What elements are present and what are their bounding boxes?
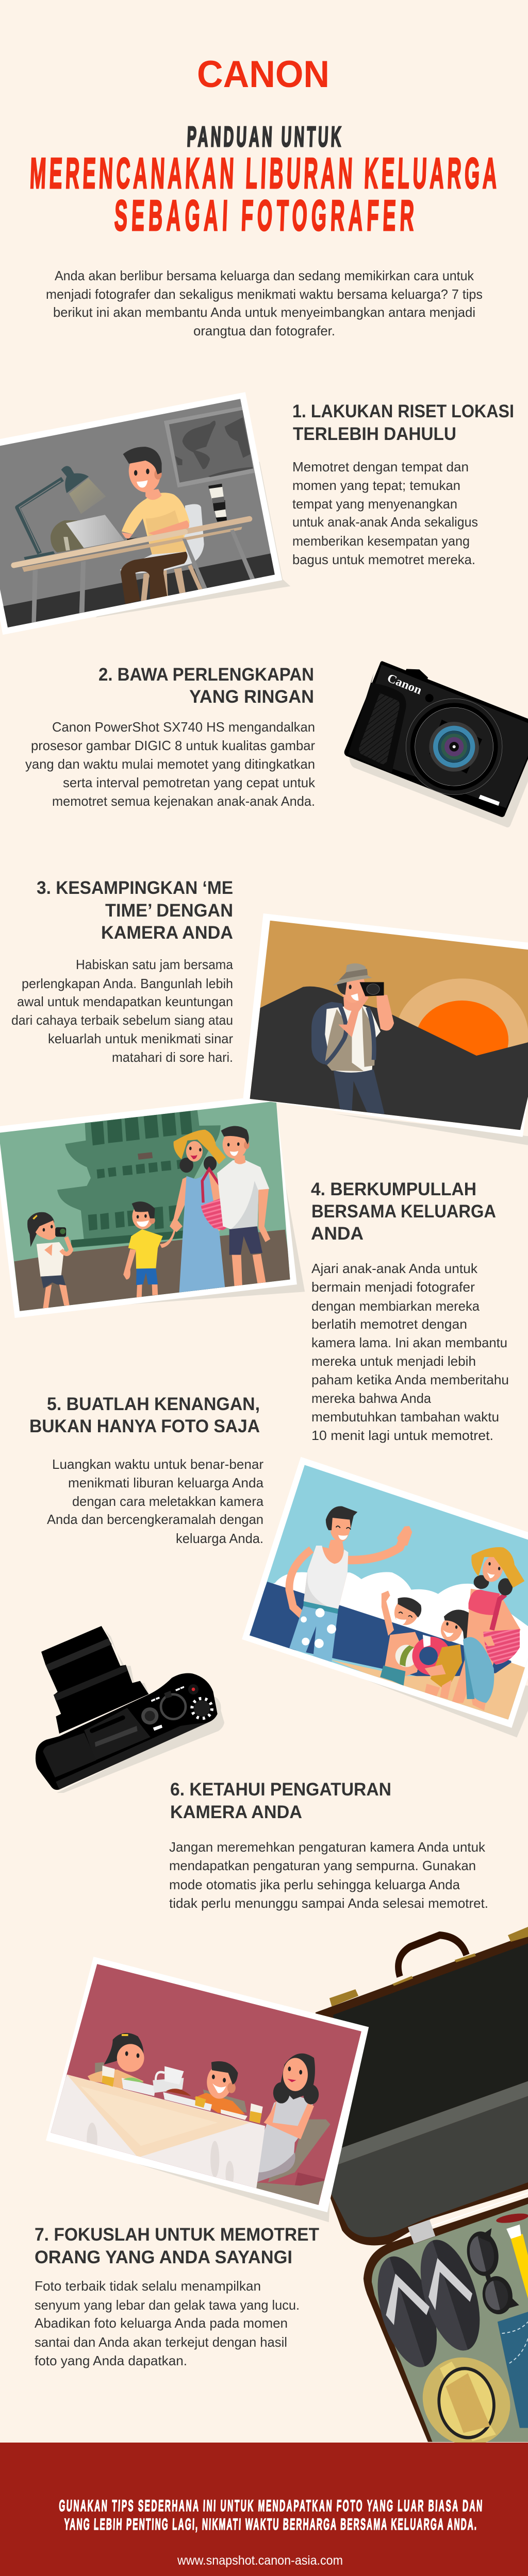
body: step 3: dari cahaya terbaik sebelum siang atau bbox=[11, 1012, 233, 1028]
title bbox=[29, 122, 498, 240]
body: step 7: foto yang Anda dapatkan. bbox=[35, 2353, 187, 2368]
step 2 text bbox=[25, 665, 316, 809]
panel: footer bbox=[0, 2443, 528, 2576]
body: step 6: tidak perlu menunggu sampai Anda selesai memotret. bbox=[169, 1895, 488, 1911]
item: straw hat bbox=[411, 2344, 521, 2459]
camera brand label: Canon bbox=[385, 671, 424, 697]
title: PANDUAN UNTUK bbox=[187, 122, 342, 153]
body: step 3: Habiskan satu jam bersama bbox=[76, 957, 234, 972]
heading: step 3 bbox=[37, 878, 233, 943]
body: step 4: bermain menjadi fotografer bbox=[311, 1279, 475, 1295]
title: SEBAGAI FOTOGRAFER bbox=[113, 191, 415, 240]
heading: step 4: ANDA bbox=[311, 1224, 364, 1244]
step 5 text bbox=[29, 1394, 264, 1546]
photo 5: family at the beach bbox=[242, 1457, 528, 1737]
body: step 6: Jangan meremehkan pengaturan kamera Anda untuk bbox=[169, 1839, 486, 1855]
photo 4: family at pagoda bbox=[0, 1092, 305, 1329]
body: step 5: keluarga Anda. bbox=[176, 1531, 263, 1546]
intro text: berikut ini akan membantu Anda untuk menyeimbangkan antara menjadi bbox=[53, 304, 475, 320]
body: step 4: kamera lama. Ini akan membantu bbox=[311, 1335, 507, 1350]
heading: step 1 bbox=[292, 401, 514, 444]
body: step 1: memberikan kesempatan yang bbox=[292, 533, 470, 549]
title: MERENCANAKAN LIBURAN KELUARGA bbox=[29, 149, 498, 197]
figure: mother with surfboard bbox=[452, 1547, 524, 1710]
icon: compact camera front bbox=[344, 661, 528, 827]
body: step 1: momen yang tepat; temukan bbox=[292, 478, 460, 493]
closing message bbox=[59, 2497, 483, 2534]
heading: step 2: 2. BAWA PERLENGKAPAN bbox=[98, 665, 314, 685]
body: step 4: mereka untuk menjadi lebih bbox=[311, 1353, 476, 1369]
suitcase base with packed items bbox=[364, 2193, 528, 2459]
heading: step 1: TERLEBIH DAHULU bbox=[293, 424, 456, 444]
body: step 5: Luangkan waktu untuk benar-benar bbox=[52, 1456, 263, 1472]
suitcase bbox=[316, 1927, 528, 2459]
body: step 7: Abadikan foto keluarga Anda pada momen bbox=[35, 2315, 288, 2331]
body: step 4: dengan membiarkan mereka bbox=[311, 1298, 480, 1314]
heading: step 5: 5. BUATLAH KENANGAN, bbox=[47, 1394, 260, 1414]
body: step 4: berlatih memotret dengan bbox=[311, 1316, 467, 1332]
heading: step 6: 6. KETAHUI PENGATURAN bbox=[170, 1780, 391, 1800]
figure: boy bbox=[123, 1201, 180, 1298]
heading: step 5 bbox=[29, 1394, 260, 1436]
body: step 2: memotret semua kejenakan anak-anak Anda. bbox=[52, 793, 315, 809]
heading: step 4: 4. BERKUMPULLAH bbox=[311, 1179, 476, 1199]
step 3 text bbox=[11, 878, 234, 1065]
body: step 2: serta interval pemotretan yang cepat untuk bbox=[63, 775, 316, 790]
icon: compact camera top view bbox=[36, 1626, 224, 1793]
body: step 5: Anda dan bercengkeramalah dengan bbox=[47, 1512, 263, 1527]
intro text: menjadi fotografer dan sekaligus menikmati waktu bersama keluarga? 7 tips bbox=[46, 286, 483, 302]
body: step 3: keluarlah untuk menikmati sinar bbox=[48, 1031, 233, 1046]
step 4 text bbox=[311, 1179, 509, 1443]
closing message: YANG LEBIH PENTING LAGI, NIKMATI WAKTU BERHARGA BERSAMA KELUARGA ANDA. bbox=[64, 2516, 477, 2534]
intro text: orangtua dan fotografer. bbox=[193, 323, 335, 338]
closing message: GUNAKAN TIPS SEDERHANA INI UNTUK MENDAPATKAN FOTO YANG LUAR BIASA DAN bbox=[59, 2497, 483, 2515]
photo 1: man researching at desk bbox=[0, 392, 293, 635]
heading: step 3: 3. KESAMPINGKAN ‘ME bbox=[37, 878, 233, 898]
heading: step 7: 7. FOKUSLAH UNTUK MEMOTRET bbox=[35, 2225, 319, 2245]
body: step 4: Ajari anak-anak Anda untuk bbox=[311, 1261, 478, 1276]
body: step 2 bbox=[25, 719, 316, 809]
step 1 text bbox=[292, 401, 514, 567]
body: step 1 bbox=[292, 459, 478, 567]
body: step 5: dengan cara meletakkan kamera bbox=[72, 1494, 264, 1509]
body: step 3: perlengkapan Anda. Bangunlah lebih bbox=[22, 976, 233, 991]
heading: step 7: ORANG YANG ANDA SAYANGI bbox=[35, 2247, 292, 2267]
figure: boy at table bbox=[194, 2061, 247, 2114]
heading: step 2 bbox=[98, 665, 314, 707]
body: step 5: menikmati liburan keluarga Anda bbox=[68, 1475, 264, 1490]
figure: father bbox=[217, 1126, 270, 1286]
heading: step 3: TIME’ DENGAN bbox=[105, 901, 233, 921]
body: step 3: awal untuk mendapatkan keuntungan bbox=[17, 994, 233, 1009]
heading: step 2: YANG RINGAN bbox=[189, 687, 314, 707]
photo 3: photographer at sunset bbox=[236, 910, 528, 1145]
body: step 1: tempat yang menyenangkan bbox=[292, 496, 457, 512]
heading: step 4: BERSAMA KELUARGA bbox=[311, 1201, 496, 1222]
body: step 3 bbox=[11, 957, 234, 1065]
body: step 5 bbox=[47, 1456, 264, 1546]
body: step 7 bbox=[35, 2278, 300, 2368]
heading: step 4 bbox=[311, 1179, 496, 1244]
body: step 7: santai dan Anda akan terkejut dengan hasil bbox=[35, 2334, 287, 2350]
figure: girl bbox=[425, 1609, 472, 1699]
step 7 text bbox=[35, 2225, 319, 2368]
body: step 3: matahari di sore hari. bbox=[112, 1049, 233, 1065]
figure: woman at table bbox=[256, 2054, 331, 2215]
body: step 4: mereka bahwa Anda bbox=[311, 1391, 432, 1406]
intro text bbox=[46, 268, 483, 338]
website url: www.snapshot.canon-asia.com bbox=[177, 2553, 343, 2568]
figure: photographer bbox=[311, 963, 394, 1114]
table with food bbox=[46, 2065, 265, 2189]
intro text: Anda akan berlibur bersama keluarga dan sedang memikirkan cara untuk bbox=[55, 268, 474, 283]
beach ring bbox=[412, 1635, 451, 1675]
figure: mother with bag bbox=[170, 1129, 227, 1293]
heading: step 1: 1. LAKUKAN RISET LOKASI bbox=[292, 401, 514, 421]
figure: girl with camera bbox=[27, 1212, 71, 1308]
body: step 2: prosesor gambar DIGIC 8 untuk kualitas gambar bbox=[31, 738, 315, 753]
body: step 4 bbox=[311, 1261, 509, 1443]
suitcase lid bbox=[316, 1927, 528, 2245]
photo 7: family dinner bbox=[40, 1957, 372, 2222]
body: step 7: senyum yang lebar dan gelak tawa yang lucu. bbox=[35, 2297, 300, 2313]
body: step 1: Memotret dengan tempat dan bbox=[292, 459, 469, 474]
body: step 2: Canon PowerShot SX740 HS mengandalkan bbox=[52, 719, 315, 735]
item: jeans bbox=[498, 2312, 528, 2428]
item: sunglasses bbox=[463, 2227, 519, 2318]
body: step 4: 10 menit lagi untuk memotret. bbox=[311, 1428, 493, 1443]
heading: step 7 bbox=[35, 2225, 319, 2267]
body: step 7: Foto terbaik tidak selalu menampilkan bbox=[35, 2278, 261, 2294]
heading: step 6 bbox=[170, 1780, 391, 1822]
item: flip-flops bbox=[366, 2231, 491, 2376]
heading: step 3: KAMERA ANDA bbox=[101, 923, 233, 943]
body: step 4: membutuhkan tambahan waktu bbox=[311, 1409, 499, 1425]
body: step 4: paham ketika Anda memberitahu bbox=[311, 1372, 509, 1387]
heading: step 5: BUKAN HANYA FOTO SAJA bbox=[29, 1416, 260, 1436]
body: step 2: yang dan waktu mulai memotet yang ditingkatkan bbox=[25, 756, 315, 772]
figure: boy with ball bbox=[380, 1590, 423, 1686]
brand logo: Canon: CANON bbox=[197, 54, 329, 95]
body: step 1: untuk anak-anak Anda sekaligus bbox=[292, 514, 478, 530]
heading: step 6: KAMERA ANDA bbox=[170, 1802, 302, 1822]
body: step 6: mendapatkan pengaturan yang sempurna. Gunakan bbox=[169, 1858, 476, 1873]
body: step 6 bbox=[169, 1839, 488, 1911]
body: step 6: mode otomatis jika perlu sehingga keluarga Anda bbox=[169, 1877, 460, 1892]
body: step 1: bagus untuk memotret mereka. bbox=[292, 552, 475, 567]
step 6 text bbox=[169, 1780, 488, 1911]
figure: man waving bbox=[289, 1506, 412, 1663]
figure: girl at table bbox=[88, 2033, 144, 2090]
item: sunscreen tube bbox=[506, 2225, 528, 2298]
